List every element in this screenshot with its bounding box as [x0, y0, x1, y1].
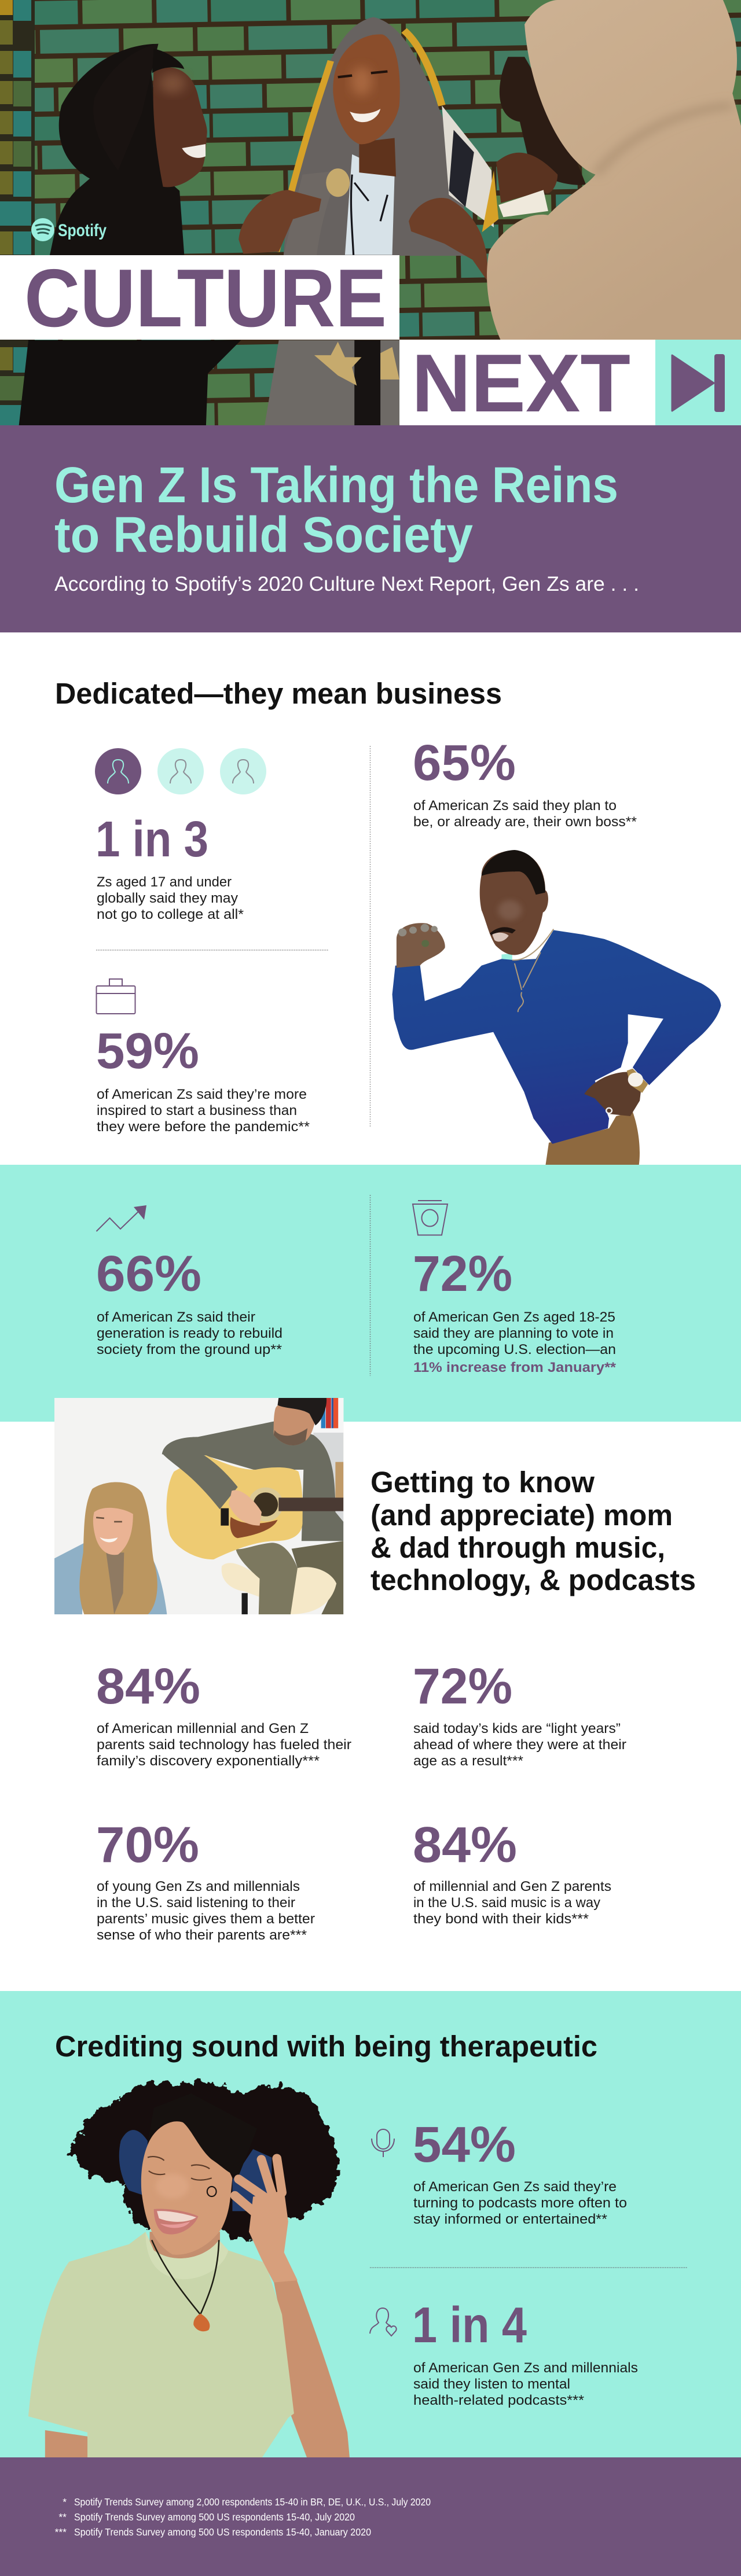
stat: 72% vote: 72% — [413, 1246, 512, 1302]
photo: girl with headphones — [28, 2082, 350, 2457]
stat: 66%: society from the ground up** — [97, 1342, 282, 1357]
stat: 72% light years: 72% — [413, 1658, 512, 1714]
icon: rising chart arrow — [96, 1205, 146, 1231]
stat: 65% — [413, 735, 637, 830]
title band: CULTURE: CULTURE — [24, 252, 387, 344]
footnote: three stars: *** — [55, 2526, 67, 2538]
icon: briefcase — [96, 979, 135, 1014]
stat: 1 in 4: said they listen to mental — [413, 2376, 570, 2392]
stat: 84% technology: 84% — [96, 1658, 200, 1714]
hero photo: three friends against a green brick wall — [0, 0, 741, 425]
stat: 84% technology — [96, 1658, 351, 1769]
footnote: one star: Spotify Trends Survey among 2,000 respondents 15-40 in BR, DE, U.K., U.S., July 2020 — [74, 2496, 431, 2508]
title band: NEXT: NEXT — [412, 337, 630, 429]
person left: black hoodie — [19, 44, 241, 425]
stat: 54%: of American Gen Zs said they’re — [413, 2179, 617, 2195]
person right: beige hoodie — [487, 0, 741, 341]
section heading: getting to know parents: (and appreciate) mom — [370, 1499, 673, 1532]
stat: 72% light years — [413, 1658, 626, 1769]
stat: 66%: of American Zs said their — [97, 1309, 255, 1325]
stat: 70% parents' music: in the U.S. said listening to their — [97, 1895, 295, 1911]
section heading: getting to know parents: & dad through music, — [370, 1531, 665, 1564]
stat: 70% parents' music: of young Gen Zs and millennials — [97, 1879, 300, 1894]
icon: next-track button — [655, 340, 741, 425]
panel: headline band — [0, 425, 741, 632]
stat: 65%: of American Zs said they plan to — [413, 798, 617, 814]
section heading: getting to know parents: Getting to know — [370, 1466, 595, 1499]
main heading: Gen Z Is Taking the Reins — [54, 457, 618, 513]
photo: man in blue sweater with raised fist — [392, 850, 721, 1167]
logo: Spotify — [31, 218, 107, 241]
stat: 72% vote: of American Gen Zs aged 18-25 — [413, 1309, 615, 1325]
stat: 54%: stay informed or entertained** — [413, 2211, 607, 2227]
stat: 84% bonding — [413, 1817, 611, 1927]
footnote: three stars: Spotify Trends Survey among 500 US respondents 15-40, January 2020 — [74, 2526, 371, 2538]
stat: 66%: 66% — [96, 1246, 201, 1302]
stat: 59%: of American Zs said they’re more — [97, 1087, 307, 1102]
stat: 1 in 3: 1 in 3 — [96, 811, 208, 867]
stat: 72% vote: 11% increase from January** — [413, 1360, 617, 1375]
icon: person with heart — [370, 2308, 397, 2336]
stat: 72% vote: said they are planning to vote in — [413, 1326, 614, 1341]
stat: 70% parents' music: sense of who their parents are*** — [97, 1927, 307, 1943]
icon: voting cup — [413, 1201, 447, 1235]
stat: 54% — [413, 2117, 627, 2227]
stat: 1 in 3: globally said they may — [97, 890, 238, 906]
main heading: to Rebuild Society — [54, 507, 473, 563]
person centre: scarf — [239, 17, 498, 425]
stat: 1 in 4 — [412, 2297, 638, 2408]
stat: 59%: they were before the pandemic** — [97, 1119, 310, 1135]
stat: 1 in 3: not go to college at all* — [97, 907, 244, 922]
stat: 72% light years: ahead of where they were at their — [413, 1737, 626, 1753]
stat: 1 in 4: of American Gen Zs and millennials — [413, 2360, 638, 2376]
stat: 72% light years: said today’s kids are “light years” — [413, 1721, 621, 1736]
stat: 70% parents' music: parents’ music gives them a better — [97, 1911, 315, 1927]
logo: Spotify: Spotify — [58, 221, 107, 240]
stat: 84% bonding: they bond with their kids*** — [413, 1911, 589, 1927]
stat: 59%: inspired to start a business than — [97, 1103, 297, 1118]
stat: 72% vote: the upcoming U.S. election—an — [413, 1342, 616, 1357]
stat: 84% bonding: of millennial and Gen Z parents — [413, 1879, 611, 1894]
stat: 59%: 59% — [96, 1023, 199, 1079]
stat: 65%: 65% — [413, 735, 516, 791]
section heading: getting to know parents: technology, & podcasts — [370, 1563, 696, 1596]
footnote: two stars: Spotify Trends Survey among 500 US respondents 15-40, July 2020 — [74, 2511, 355, 2523]
section heading: getting to know parents — [370, 1466, 696, 1596]
stat: 54%: turning to podcasts more often to — [413, 2195, 627, 2211]
stat: 1 in 3: Zs aged 17 and under — [97, 874, 232, 890]
stat: 1 in 3 — [96, 811, 244, 922]
panel: footnotes — [0, 2457, 741, 2576]
stat: 59% — [96, 1023, 310, 1135]
icon: microphone — [372, 2129, 394, 2157]
section heading: crediting sound: Crediting sound with being therapeutic — [55, 2030, 597, 2063]
stat: 70% parents' music — [96, 1817, 315, 1943]
stat: 72% vote — [413, 1246, 617, 1375]
stat: 1 in 4: health-related podcasts*** — [413, 2393, 584, 2408]
panel: therapeutic section — [0, 1991, 741, 2457]
stat: 54%: 54% — [413, 2117, 516, 2173]
stat: 66%: generation is ready to rebuild — [97, 1326, 283, 1341]
footnote: one star: * — [63, 2496, 67, 2508]
panel: teal stats band — [0, 1165, 741, 1422]
stat: 84% bonding: in the U.S. said music is a way — [413, 1895, 600, 1911]
icon: three people, one in three highlighted — [95, 748, 266, 794]
stat: 1 in 4: 1 in 4 — [412, 2297, 527, 2353]
stat: 84% bonding: 84% — [413, 1817, 517, 1873]
footnote: two stars: ** — [58, 2511, 67, 2523]
stat: 84% technology: of American millennial and Gen Z — [97, 1721, 309, 1736]
stat: 84% technology: family’s discovery exponentially*** — [97, 1753, 320, 1769]
section heading: dedicated: Dedicated—they mean business — [55, 677, 502, 710]
photo: couple with acoustic guitar — [54, 1398, 344, 1614]
stat: 84% technology: parents said technology has fueled their — [97, 1737, 351, 1753]
subheading: According to Spotify’s 2020 Culture Next Report, Gen Zs are . . . — [54, 573, 639, 595]
stat: 66% — [96, 1246, 283, 1357]
stat: 65%: be, or already are, their own boss** — [413, 814, 637, 830]
main heading — [54, 457, 618, 563]
stat: 70% parents' music: 70% — [96, 1817, 199, 1873]
stat: 72% light years: age as a result*** — [413, 1753, 523, 1769]
